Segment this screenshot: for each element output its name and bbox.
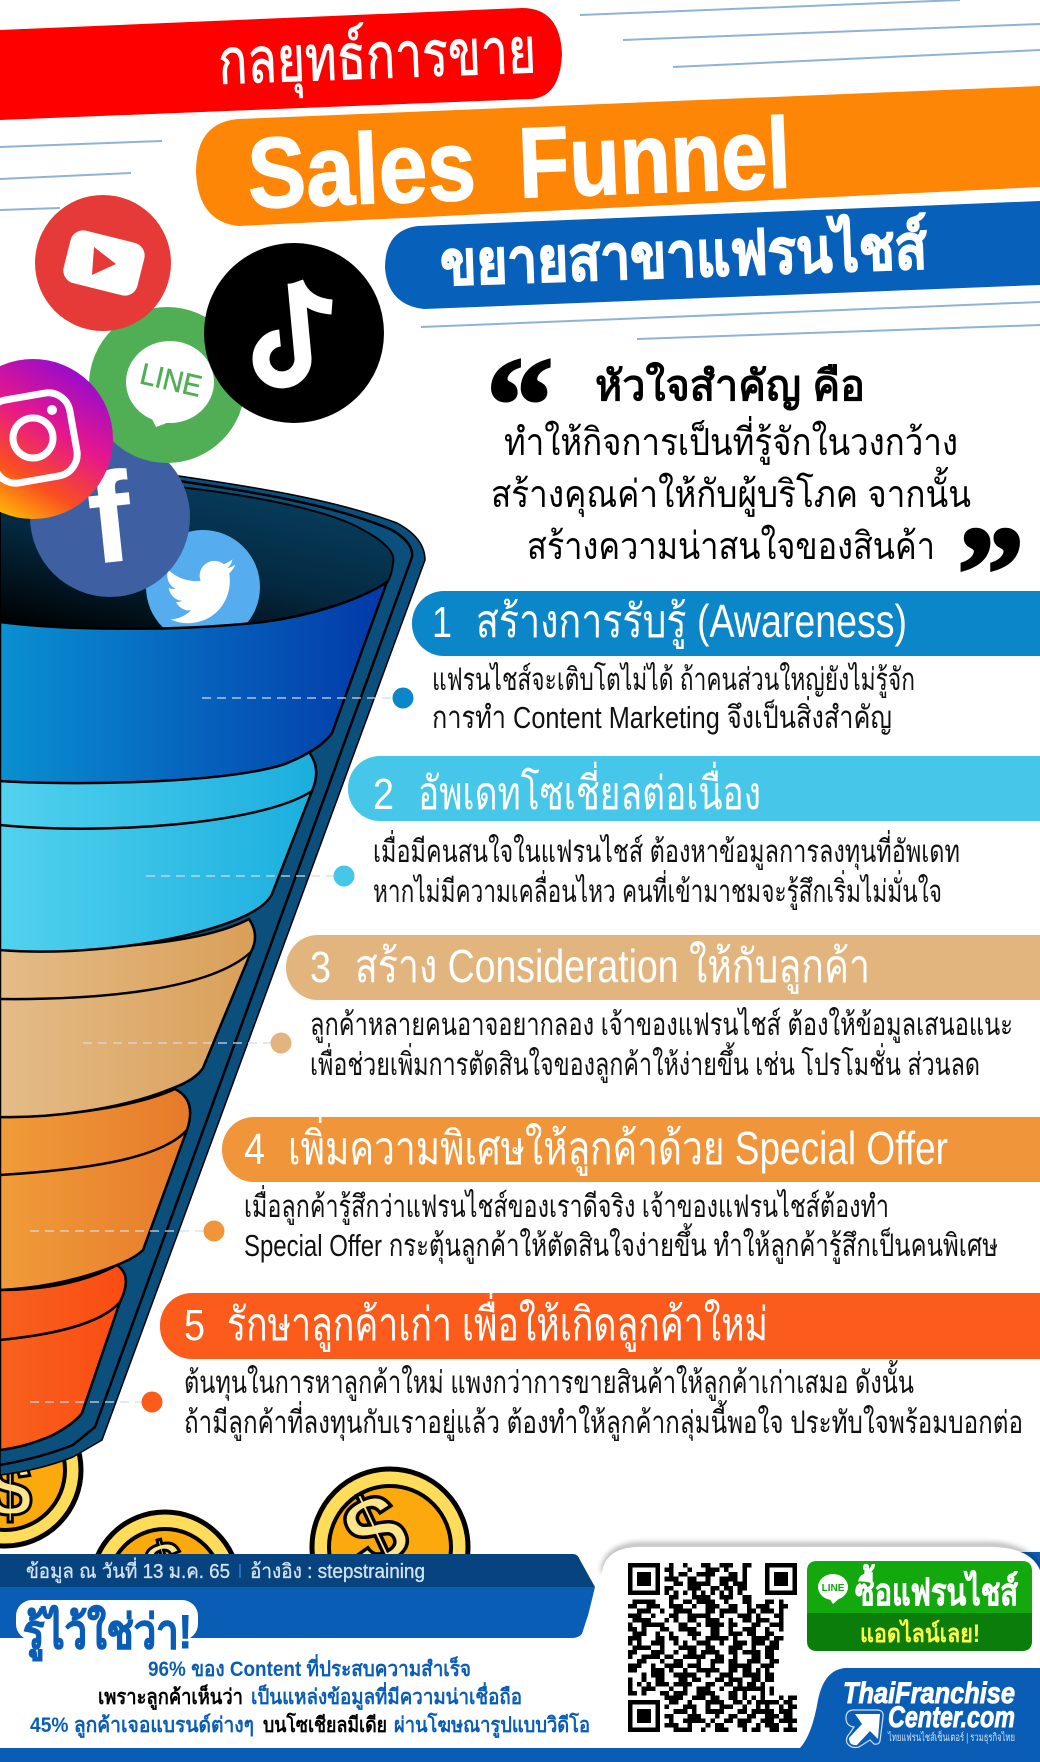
step 5 banner: 5 — [184, 1301, 205, 1350]
title banner: orange Sales Funnel: Sales — [246, 109, 478, 230]
logo background — [800, 1668, 1040, 1748]
step 1 banner: สร้างการรับรู้ (Awareness) — [476, 595, 907, 649]
coin right: $ — [327, 1469, 425, 1594]
step 2 banner: อัพเดทโซเชี่ยลต่อเนื่อง — [418, 761, 761, 819]
step 5 banner: รักษาลูกค้าเก่า เพื่อให้เกิดลูกค้าใหม่ — [227, 1292, 768, 1352]
step 5 banner — [160, 1292, 1040, 1359]
title banner: blue: ขยายสาขาแฟรนไชส์ — [439, 211, 928, 299]
icon: line bubble: LINE — [822, 1583, 845, 1594]
step 3 text — [310, 1007, 1013, 1083]
funnel interior — [0, 482, 393, 629]
step 3 — [83, 935, 1040, 1083]
title banner: orange Sales Funnel: Funnel — [516, 97, 792, 220]
source bar: ข้อมูล ณ วันที่ 13 ม.ค. 65 — [26, 1557, 230, 1584]
step 1 banner: 1 — [432, 598, 452, 647]
step 2 banner — [348, 756, 1040, 821]
quote line 3: สร้างความน่าสนใจของสินค้า — [527, 525, 935, 568]
did you know text: 45% ลูกค้าเจอแบรนด์ต่างๆ — [30, 1713, 254, 1739]
funnel layer 1 — [0, 582, 387, 783]
step 5 text — [184, 1360, 1023, 1442]
step 4 pointer — [30, 1220, 224, 1242]
did you know text: ผ่านโฆษณารูปแบบวิดีโอ — [394, 1712, 590, 1739]
step 1 text — [432, 662, 915, 735]
title banner: red: กลยุทธ์การขาย — [217, 14, 537, 101]
step 3 banner: 3 — [310, 943, 331, 992]
line button — [807, 1561, 1032, 1651]
coin right — [310, 1466, 470, 1554]
funnel layer 3 — [0, 919, 255, 1117]
did you know text: 96% ของ Content ที่ประสบความสำเร็จ — [148, 1653, 471, 1681]
panel shadow — [603, 1545, 1040, 1572]
icon: tiktok — [204, 243, 384, 423]
did you know text — [30, 1653, 590, 1739]
step 3 pointer — [83, 1032, 292, 1054]
title banner: red — [0, 8, 562, 120]
step 2 banner: 2 — [373, 770, 394, 819]
qr finder patterns — [628, 1563, 797, 1732]
step 2 text — [373, 830, 960, 910]
icon: logo arrow — [846, 1710, 883, 1748]
step 1 text: การทำ Content Marketing จึงเป็นสิ่งสำคัญ — [432, 696, 892, 735]
title banner: orange Sales Funnel — [196, 86, 1040, 230]
step 3 banner — [286, 935, 1040, 1000]
icon: facebook: f — [81, 445, 139, 592]
step 5 — [30, 1292, 1040, 1442]
source bar — [0, 1554, 595, 1587]
quote text block — [486, 331, 1024, 649]
step 2 pointer — [146, 866, 354, 886]
step 3 banner: สร้าง Consideration ให้กับลูกค้า — [355, 940, 870, 994]
funnel shell inner strokes — [0, 481, 412, 1465]
quote line 1: ทำให้กิจการเป็นที่รู้จักในวงกว้าง — [504, 416, 958, 465]
icon: twitter — [146, 530, 260, 644]
step 4 text — [244, 1185, 998, 1265]
did you know text: เพราะลูกค้าเห็นว่า — [98, 1683, 243, 1711]
step 1 banner — [412, 591, 1040, 656]
background lines — [0, 0, 1040, 339]
button top — [807, 1561, 1032, 1613]
white contact panel — [580, 1547, 1040, 1748]
icon: line: LINE — [137, 358, 205, 404]
icon: facebook — [30, 437, 190, 597]
coin middle: $ — [137, 1524, 195, 1610]
step 2 — [146, 756, 1040, 910]
closing quote mark: ” — [957, 500, 1024, 649]
step 1 — [202, 591, 1040, 735]
step 4 banner: 4 — [244, 1125, 265, 1174]
icon: instagram — [0, 359, 113, 519]
funnel layer 2 — [0, 751, 316, 952]
coin middle — [96, 1510, 234, 1554]
opening quote mark: “ — [486, 331, 554, 480]
quote line 2: สร้างคุณค่าให้กับผู้บริโภค จากนั้น — [491, 466, 971, 517]
button bottom — [807, 1613, 1032, 1651]
step 1 pointer — [202, 688, 414, 708]
funnel layer 4 — [0, 1089, 190, 1290]
did you know heading: รู้ไว้ใช่ว่า! — [23, 1604, 192, 1662]
funnel shell — [0, 470, 425, 1475]
qr code — [628, 1563, 797, 1732]
coin left — [0, 1452, 84, 1548]
button sublabel: แอดไลน์เลย! — [860, 1618, 980, 1648]
step 4 — [30, 1116, 1040, 1265]
icon: line — [89, 307, 245, 463]
funnel layer 5 — [0, 1265, 126, 1450]
did you know text: เป็นแหล่งข้อมูลที่มีความน่าเชื่อถือ — [251, 1681, 522, 1711]
step 5 pointer — [30, 1392, 162, 1412]
did you know bar — [0, 1587, 595, 1638]
quote heading: หัวใจสำคัญ คือ — [595, 361, 865, 411]
qr modules — [628, 1565, 797, 1730]
source bar: อ้างอิง : stepstraining — [250, 1561, 425, 1583]
coins — [0, 1452, 470, 1554]
logo — [800, 1668, 1040, 1748]
blue corner behind panel — [1020, 1552, 1040, 1582]
funnel — [0, 470, 425, 1475]
did you know text: บนโซเชียลมีเดีย — [263, 1712, 387, 1737]
icon: line bubble — [818, 1574, 848, 1604]
bottom bar: blue strip — [0, 1748, 1040, 1762]
icon: youtube — [35, 195, 171, 331]
